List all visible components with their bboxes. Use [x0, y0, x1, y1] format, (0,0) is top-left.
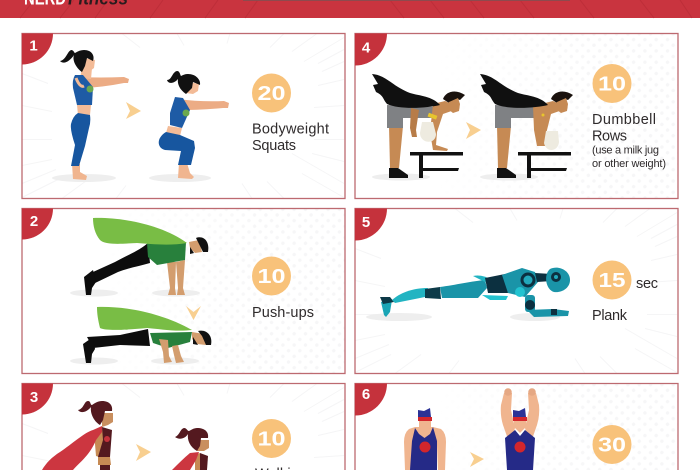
badge 5 [355, 208, 387, 240]
label: Rows [592, 128, 627, 144]
arrow [470, 452, 484, 467]
label: Push-ups [252, 305, 314, 321]
badge 6 [355, 384, 387, 416]
figure: row start [372, 74, 465, 180]
figure: row finish [480, 74, 573, 180]
count: 10 [252, 256, 291, 296]
figure: push-up low [70, 307, 211, 364]
count: 30: 30 [598, 434, 626, 456]
figure: squat [149, 71, 229, 182]
figure: standing [52, 50, 129, 182]
label: Plank [592, 308, 628, 324]
label: Squats [252, 138, 296, 154]
badge 1 [22, 34, 53, 64]
badge 1: 1 [29, 38, 38, 54]
badge 5: 5 [362, 214, 370, 231]
count: 30 [592, 425, 632, 464]
arrow down [186, 306, 201, 320]
panel 3: walking lunges [22, 384, 345, 470]
arrow [126, 102, 141, 119]
count: 20 [252, 74, 291, 112]
panel 4: dumbbell rows [355, 34, 678, 198]
figure: arms up [501, 388, 539, 470]
arrow [136, 444, 151, 461]
count: 10 [592, 64, 632, 103]
label: Dumbbell [592, 112, 656, 128]
figure: arms down [404, 408, 446, 470]
figure: push-up high [70, 218, 208, 296]
figure: robot plank [366, 268, 570, 321]
badge 6: 6 [362, 386, 370, 403]
label: Bodyweight [252, 122, 329, 138]
count: 20: 20 [258, 83, 286, 105]
badge 3 [22, 384, 53, 414]
count: 15: 15 [598, 270, 626, 292]
figure: standing hero [42, 401, 113, 470]
count: 10: 10 [258, 428, 286, 450]
unit: sec: sec [636, 276, 658, 292]
badge 4 [355, 34, 387, 66]
count: 10: 10 [598, 74, 626, 96]
label: or other weight) [592, 158, 666, 170]
badge 4: 4 [362, 40, 371, 56]
badge 3: 3 [30, 389, 38, 406]
figure: lunge hero [172, 428, 209, 470]
arrow [466, 122, 481, 139]
panel 5: plank [355, 208, 678, 374]
panel 1: bodyweight squats [22, 34, 345, 198]
badge 2: 2 [30, 213, 38, 230]
count: 10: 10 [258, 266, 286, 288]
panel 6: jumping jacks [355, 384, 678, 470]
panel 2: push-ups [22, 208, 345, 374]
label: (use a milk jug [592, 144, 659, 156]
count: 10 [252, 419, 291, 458]
count: 15 [592, 260, 632, 300]
header banner [0, 0, 700, 18]
badge 2 [22, 208, 53, 240]
